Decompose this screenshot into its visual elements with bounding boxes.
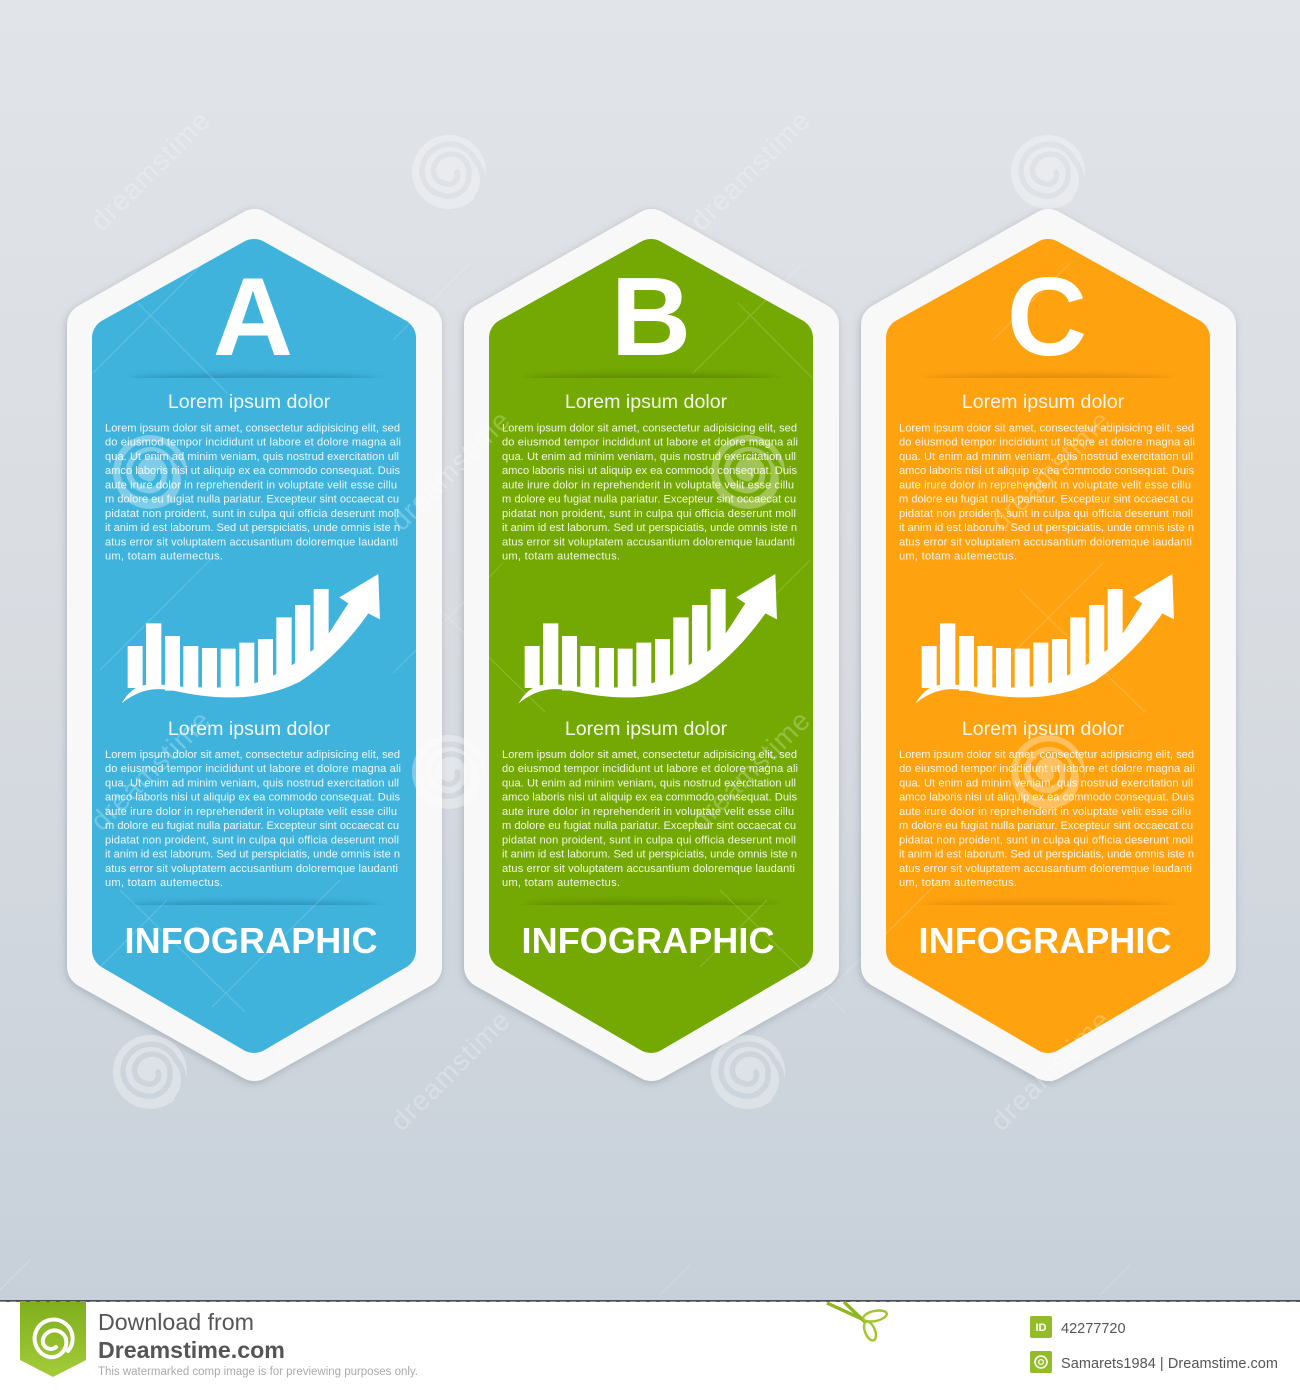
letter B: B <box>611 255 691 379</box>
body text C bottom: qua. Ut enim ad minim veniam, quis nostrud exercitation ull <box>899 778 1193 790</box>
brand text: Dreamstime.com <box>98 1337 285 1363</box>
panel B colour fill <box>509 259 793 1033</box>
body text A bottom <box>105 749 401 889</box>
body text B top: aute irure dolor in reprehenderit in voluptate velit esse cillu <box>502 480 794 492</box>
body text A top: Lorem ipsum dolor sit amet, consectetur adipisicing elit, sed <box>105 422 400 434</box>
body text C bottom: um, totam autemectus. <box>899 877 1017 889</box>
body text B top: amco laboris nisi ut aliquip ex ea commodo consequat. Duis <box>502 465 797 477</box>
body text C bottom: Lorem ipsum dolor sit amet, consectetur adipisicing elit, sed <box>899 749 1194 761</box>
body text B bottom: um, totam autemectus. <box>502 877 620 889</box>
panel C white frame <box>883 231 1214 1059</box>
body text C top: pidatat non proident, sunt in culpa qui officia deserunt moll <box>899 508 1193 520</box>
heading B bottom: Lorem ipsum dolor <box>565 718 728 740</box>
body text B top: qua. Ut enim ad minim veniam, quis nostrud exercitation ull <box>502 451 796 463</box>
panel C fold shadows <box>923 374 1173 911</box>
ID badge: ID <box>1036 1322 1047 1334</box>
body text B bottom: m dolore eu fugiat nulla pariatur. Excepteur sint occaecat cu <box>502 820 796 832</box>
body text C bottom <box>899 749 1195 889</box>
body text A bottom: m dolore eu fugiat nulla pariatur. Excepteur sint occaecat cu <box>105 820 399 832</box>
body text C top: amco laboris nisi ut aliquip ex ea commodo consequat. Duis <box>899 465 1194 477</box>
body text C bottom: aute irure dolor in reprehenderit in voluptate velit esse cillu <box>899 806 1191 818</box>
body text A bottom: qua. Ut enim ad minim veniam, quis nostrud exercitation ull <box>105 778 399 790</box>
panel C colour fill <box>906 259 1190 1033</box>
heading C bottom: Lorem ipsum dolor <box>962 718 1125 740</box>
heading B top: Lorem ipsum dolor <box>565 391 728 413</box>
scissors icon <box>827 1302 888 1342</box>
body text B bottom: it anim id est laborum. Sed ut perspiciatis, unde omnis iste n <box>502 849 797 861</box>
footer cut line <box>0 1300 1300 1302</box>
label INFOGRAPHIC C: INFOGRAPHIC <box>918 920 1172 961</box>
body text A top <box>105 422 401 563</box>
chart icon A <box>122 574 380 703</box>
credit text: Samarets1984 | Dreamstime.com <box>1061 1356 1278 1372</box>
body text C top: m dolore eu fugiat nulla pariatur. Excepteur sint occaecat cu <box>899 494 1193 506</box>
body text A bottom: atus error sit voluptatem accusantium doloremque laudanti <box>105 863 398 875</box>
body text B top: um, totam autemectus. <box>502 551 620 563</box>
body text B top <box>502 422 798 563</box>
body text A top: qua. Ut enim ad minim veniam, quis nostrud exercitation ull <box>105 451 399 463</box>
body text C bottom: amco laboris nisi ut aliquip ex ea commodo consequat. Duis <box>899 792 1194 804</box>
body text B top: do eiusmod tempor incididunt ut labore et dolore magna ali <box>502 437 798 449</box>
body text A bottom: do eiusmod tempor incididunt ut labore et dolore magna ali <box>105 763 401 775</box>
watermark words: dreamstime <box>384 404 517 537</box>
body text C top: qua. Ut enim ad minim veniam, quis nostrud exercitation ull <box>899 451 1193 463</box>
watermark words: dreamstime <box>684 104 817 237</box>
body text B top: m dolore eu fugiat nulla pariatur. Excepteur sint occaecat cu <box>502 494 796 506</box>
body text B bottom <box>502 749 798 889</box>
heading A top: Lorem ipsum dolor <box>168 391 331 413</box>
body text C top: atus error sit voluptatem accusantium doloremque laudanti <box>899 536 1192 548</box>
footer <box>0 1301 1300 1390</box>
body text C top: Lorem ipsum dolor sit amet, consectetur adipisicing elit, sed <box>899 422 1194 434</box>
body text A top: m dolore eu fugiat nulla pariatur. Excepteur sint occaecat cu <box>105 494 399 506</box>
badge spiral <box>35 1320 73 1357</box>
body text B bottom: Lorem ipsum dolor sit amet, consectetur adipisicing elit, sed <box>502 749 797 761</box>
panel A colour fill <box>112 259 396 1033</box>
body text C top: do eiusmod tempor incididunt ut labore et dolore magna ali <box>899 437 1195 449</box>
letter A: A <box>213 255 293 379</box>
body text A top: it anim id est laborum. Sed ut perspiciatis, unde omnis iste n <box>105 522 400 534</box>
body text B bottom: do eiusmod tempor incididunt ut labore et dolore magna ali <box>502 763 798 775</box>
body text B bottom: qua. Ut enim ad minim veniam, quis nostrud exercitation ull <box>502 778 796 790</box>
body text A bottom: Lorem ipsum dolor sit amet, consectetur adipisicing elit, sed <box>105 749 400 761</box>
watermark cross lines <box>0 263 1145 1295</box>
body text A bottom: aute irure dolor in reprehenderit in voluptate velit esse cillu <box>105 806 397 818</box>
body text B top: pidatat non proident, sunt in culpa qui officia deserunt moll <box>502 508 796 520</box>
body text A top: aute irure dolor in reprehenderit in voluptate velit esse cillu <box>105 480 397 492</box>
watermark overlay <box>0 104 1145 1295</box>
ID number: 42277720 <box>1061 1321 1126 1337</box>
copyright badge <box>1030 1351 1052 1373</box>
panel B fold shadows <box>526 374 776 911</box>
chart icon B <box>519 574 777 703</box>
body text A top: amco laboris nisi ut aliquip ex ea commodo consequat. Duis <box>105 465 400 477</box>
body text B bottom: amco laboris nisi ut aliquip ex ea commodo consequat. Duis <box>502 792 797 804</box>
watermark words: dreamstime <box>684 704 817 837</box>
body text C bottom: pidatat non proident, sunt in culpa qui officia deserunt moll <box>899 834 1193 846</box>
body text A top: um, totam autemectus. <box>105 551 223 563</box>
watermark words: dreamstime <box>984 404 1117 537</box>
panel A fold shadows <box>129 374 379 911</box>
watermark spirals <box>113 135 1085 1109</box>
footer dashes <box>0 1301 1300 1303</box>
body text A bottom: pidatat non proident, sunt in culpa qui officia deserunt moll <box>105 834 399 846</box>
watermark words <box>84 104 1117 1137</box>
letter C: C <box>1007 255 1087 379</box>
label INFOGRAPHIC A: INFOGRAPHIC <box>124 920 378 961</box>
body text C bottom: it anim id est laborum. Sed ut perspiciatis, unde omnis iste n <box>899 849 1194 861</box>
body text B bottom: atus error sit voluptatem accusantium doloremque laudanti <box>502 863 795 875</box>
body text C bottom: do eiusmod tempor incididunt ut labore et dolore magna ali <box>899 763 1195 775</box>
watermark words: dreamstime <box>84 104 217 237</box>
chart icon C <box>916 574 1174 703</box>
body text A top: atus error sit voluptatem accusantium doloremque laudanti <box>105 536 398 548</box>
body text C top: aute irure dolor in reprehenderit in voluptate velit esse cillu <box>899 480 1191 492</box>
footer white strip <box>0 1301 1300 1390</box>
disclaimer text: This watermarked comp image is for previewing purposes only. <box>98 1366 418 1378</box>
panel A white frame <box>89 231 420 1059</box>
body text C top <box>899 422 1195 563</box>
body text B bottom: pidatat non proident, sunt in culpa qui officia deserunt moll <box>502 834 796 846</box>
watermark words: dreamstime <box>384 1004 517 1137</box>
body text C top: um, totam autemectus. <box>899 551 1017 563</box>
body text B top: atus error sit voluptatem accusantium doloremque laudanti <box>502 536 795 548</box>
label INFOGRAPHIC B: INFOGRAPHIC <box>522 920 774 961</box>
body text C bottom: atus error sit voluptatem accusantium doloremque laudanti <box>899 863 1192 875</box>
panel: B <box>486 231 817 1059</box>
heading A bottom: Lorem ipsum dolor <box>168 718 331 740</box>
panel B white frame <box>486 231 817 1059</box>
heading C top: Lorem ipsum dolor <box>962 391 1125 413</box>
body text B top: it anim id est laborum. Sed ut perspiciatis, unde omnis iste n <box>502 522 797 534</box>
body text A top: do eiusmod tempor incididunt ut labore et dolore magna ali <box>105 437 401 449</box>
watermark words: dreamstime <box>84 704 217 837</box>
body text A top: pidatat non proident, sunt in culpa qui officia deserunt moll <box>105 508 399 520</box>
body text A bottom: um, totam autemectus. <box>105 877 223 889</box>
body text A bottom: amco laboris nisi ut aliquip ex ea commodo consequat. Duis <box>105 792 400 804</box>
panel: A <box>89 231 420 1059</box>
panel: C <box>883 231 1214 1059</box>
watermark words: dreamstime <box>984 1004 1117 1137</box>
body text B bottom: aute irure dolor in reprehenderit in voluptate velit esse cillu <box>502 806 794 818</box>
download text: Download from <box>98 1309 254 1335</box>
body text A bottom: it anim id est laborum. Sed ut perspiciatis, unde omnis iste n <box>105 849 400 861</box>
body text C bottom: m dolore eu fugiat nulla pariatur. Excepteur sint occaecat cu <box>899 820 1193 832</box>
body text C top: it anim id est laborum. Sed ut perspiciatis, unde omnis iste n <box>899 522 1194 534</box>
body text B top: Lorem ipsum dolor sit amet, consectetur adipisicing elit, sed <box>502 422 797 434</box>
ID badge <box>1030 1316 1052 1338</box>
download badge <box>20 1302 86 1377</box>
